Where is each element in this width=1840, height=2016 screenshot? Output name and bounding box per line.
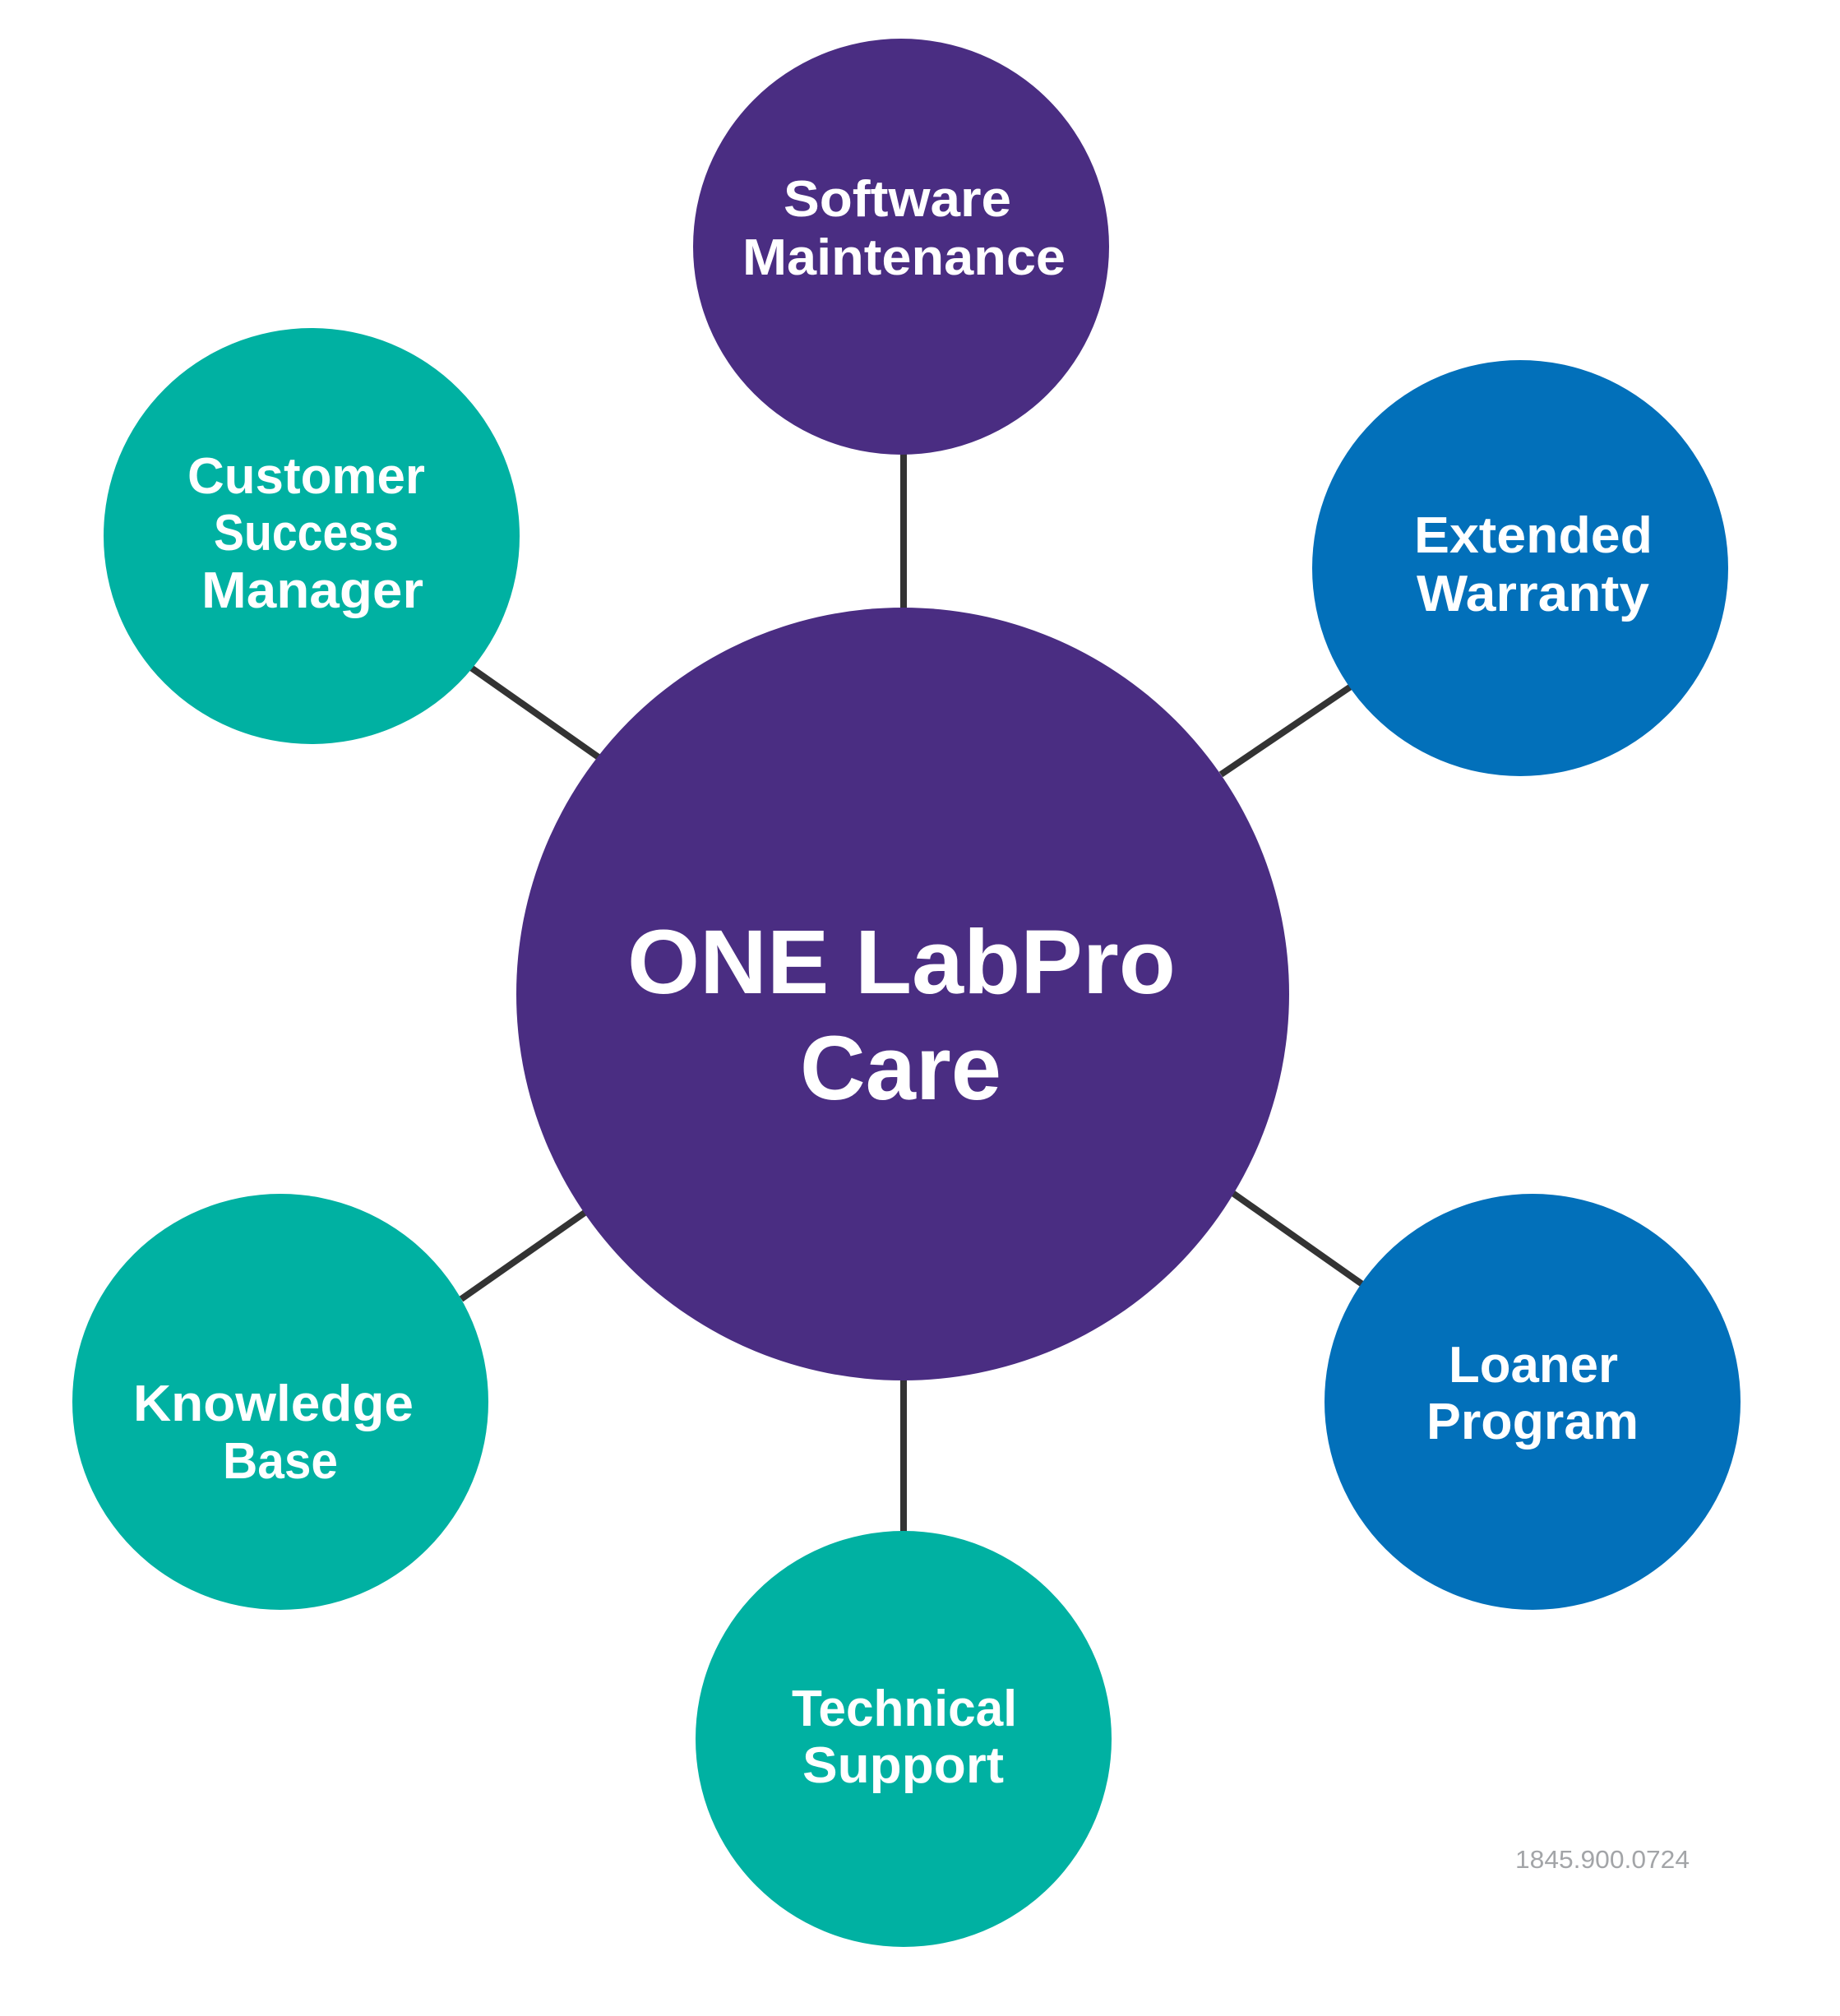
node: Loaner Program	[1325, 1194, 1741, 1610]
node: Customer Success Manager	[104, 328, 520, 744]
center title: Care	[800, 1018, 1001, 1119]
connector: center to Customer Success Manager	[469, 666, 599, 757]
connector: center to Loaner Program	[1229, 1191, 1362, 1284]
label: Knowledge Base: Knowledge	[133, 1376, 414, 1432]
center title: ONE LabPro	[627, 912, 1176, 1013]
node: Software Maintenance	[693, 39, 1109, 455]
label: Extended Warranty: Extended	[1414, 507, 1653, 564]
label: Technical Support: Support	[802, 1737, 1004, 1794]
node: Extended Warranty	[1312, 360, 1728, 776]
label: Customer Success Manager: Manager	[201, 562, 423, 619]
connector: center to Software Maintenance	[900, 452, 907, 610]
label: Extended Warranty: Warranty	[1417, 566, 1650, 622]
connector: center to Technical Support	[900, 1377, 907, 1533]
label: Customer Success Manager	[187, 448, 425, 619]
label: Extended Warranty	[1414, 507, 1653, 622]
label: Customer Success Manager: Customer	[187, 448, 425, 505]
label: Loaner Program: Program	[1426, 1394, 1639, 1450]
label: Technical Support: Technical	[792, 1681, 1017, 1737]
center title	[627, 912, 1176, 1119]
document number: 1845.900.0724	[1515, 1845, 1690, 1874]
label: Customer Success Manager: Success	[214, 505, 399, 562]
label: Loaner Program	[1426, 1337, 1639, 1450]
label: Software Maintenance: Software	[784, 171, 1011, 228]
label: Knowledge Base: Base	[223, 1433, 338, 1490]
node: Technical Support	[696, 1531, 1112, 1947]
connector: center to Knowledge Base	[461, 1211, 587, 1299]
label: Software Maintenance: Maintenance	[742, 229, 1066, 286]
connector: center to Extended Warranty	[1221, 685, 1353, 774]
label: Software Maintenance	[742, 171, 1066, 286]
center node: ONE LabPro Care	[516, 608, 1289, 1380]
label: Technical Support	[792, 1681, 1017, 1794]
label: Knowledge Base	[133, 1376, 414, 1490]
node: Knowledge Base	[72, 1194, 488, 1610]
label: Loaner Program: Loaner	[1449, 1337, 1618, 1394]
